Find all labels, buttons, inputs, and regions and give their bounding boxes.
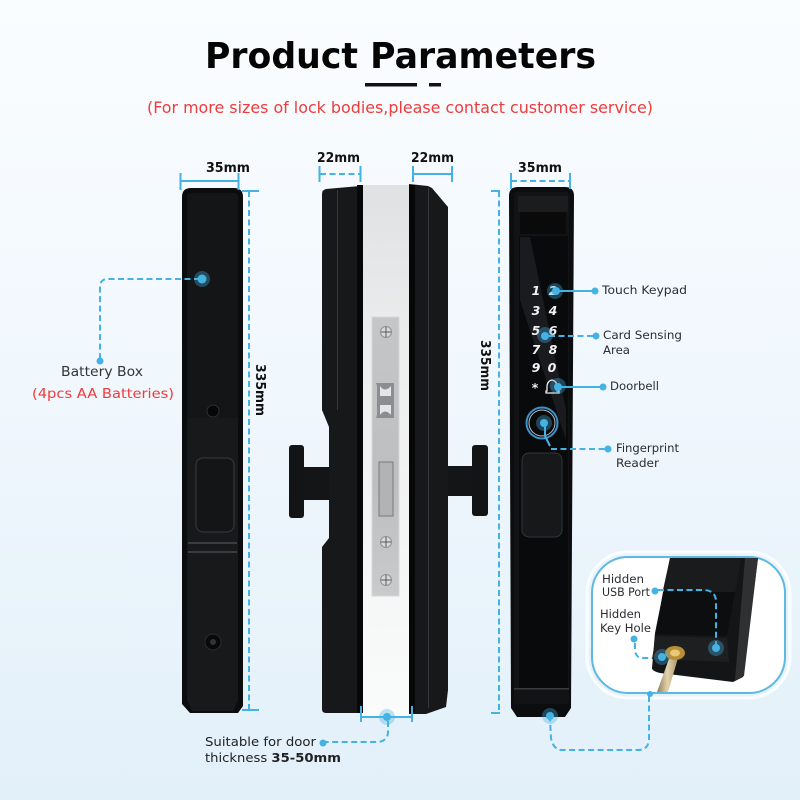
body edge highlights bbox=[337, 185, 429, 713]
height dimension 335mm: 335mm bbox=[252, 364, 267, 416]
callout: fingerprint reader bbox=[536, 415, 679, 470]
callout: touch keypad: Touch Keypad bbox=[601, 283, 687, 297]
dimension 35mm: 35mm bbox=[518, 161, 562, 176]
callout: card sensing area: Card Sensing bbox=[603, 328, 682, 342]
door edge bbox=[362, 185, 410, 717]
keypad digits: 1 bbox=[532, 283, 540, 298]
callout: card sensing area bbox=[537, 327, 682, 357]
callout: fingerprint reader: Reader bbox=[616, 456, 659, 470]
panel: back view of lock bbox=[32, 161, 267, 713]
right handle bbox=[448, 445, 488, 516]
callout: door thickness: Suitable for door bbox=[205, 734, 317, 749]
keypad digits bbox=[532, 283, 558, 395]
lock bottom closeup bbox=[652, 558, 758, 682]
dimension 22mm left bbox=[317, 151, 360, 182]
callout: battery box: Battery Box bbox=[61, 364, 143, 380]
keypad digits: 4 bbox=[548, 303, 557, 318]
subtitle: (For more sizes of lock bodies,please contact customer service) bbox=[147, 98, 653, 117]
keypad digits: 9 bbox=[532, 360, 541, 375]
callout: hidden key hole: Hidden bbox=[600, 607, 641, 621]
keypad digits: 6 bbox=[549, 323, 558, 338]
callout: hidden usb port: Hidden bbox=[602, 572, 644, 586]
keypad digits: * bbox=[532, 380, 539, 395]
callout: door thickness bbox=[205, 706, 412, 765]
dimension 22mm right: 22mm bbox=[411, 151, 454, 166]
keypad digits: 5 bbox=[532, 323, 541, 338]
callout: fingerprint reader: Fingerprint bbox=[616, 441, 679, 455]
callout: card sensing area: Area bbox=[603, 343, 630, 357]
dimension 35mm bbox=[511, 161, 570, 189]
callout: hidden key hole: Key Hole bbox=[600, 621, 651, 635]
height dimension 335mm bbox=[242, 191, 267, 710]
callout: touch keypad bbox=[547, 283, 687, 299]
panel: side view of lock and door bbox=[205, 151, 500, 765]
width dimension 35mm bbox=[180, 161, 250, 190]
height dimension 335mm: 335mm bbox=[477, 340, 492, 391]
left handle bbox=[289, 445, 330, 518]
callout: doorbell bbox=[550, 378, 659, 394]
width dimension 35mm: 35mm bbox=[206, 161, 250, 176]
callout: battery box bbox=[32, 271, 210, 402]
lock front body bbox=[509, 187, 574, 717]
keypad digits: 7 bbox=[532, 342, 541, 357]
callout: hidden usb port: USB Port bbox=[602, 585, 650, 599]
keypad digits: 2 bbox=[549, 283, 557, 298]
icon: doorbell bbox=[546, 380, 559, 393]
height dimension 335mm bbox=[477, 191, 500, 713]
lock plate bbox=[372, 317, 399, 596]
dimension 22mm left: 22mm bbox=[317, 151, 360, 166]
right lock body bbox=[409, 184, 448, 714]
left lock body bbox=[322, 186, 363, 713]
keypad digits: 8 bbox=[549, 342, 558, 357]
callout: battery box: (4pcs AA Batteries) bbox=[32, 386, 174, 402]
key bbox=[657, 646, 685, 692]
panel: front view of lock bbox=[509, 161, 687, 717]
callout: hidden key hole bbox=[600, 607, 670, 665]
panel: hidden usb port and key hole inset bbox=[542, 552, 790, 750]
connector to lock bottom bbox=[542, 691, 653, 750]
dimension 22mm right bbox=[411, 151, 454, 182]
callout: hidden usb port bbox=[602, 572, 724, 656]
callout: door thickness: thickness 35-50mm bbox=[205, 750, 341, 765]
lock back body bbox=[182, 188, 243, 713]
keypad digits: 0 bbox=[548, 360, 557, 375]
callout: doorbell: Doorbell bbox=[610, 379, 659, 393]
keypad digits: 3 bbox=[532, 303, 540, 318]
inset outer glow bbox=[587, 552, 790, 698]
fingerprint reader bbox=[526, 408, 558, 438]
title: Product Parameters bbox=[205, 36, 596, 77]
inset frame bbox=[592, 557, 785, 693]
